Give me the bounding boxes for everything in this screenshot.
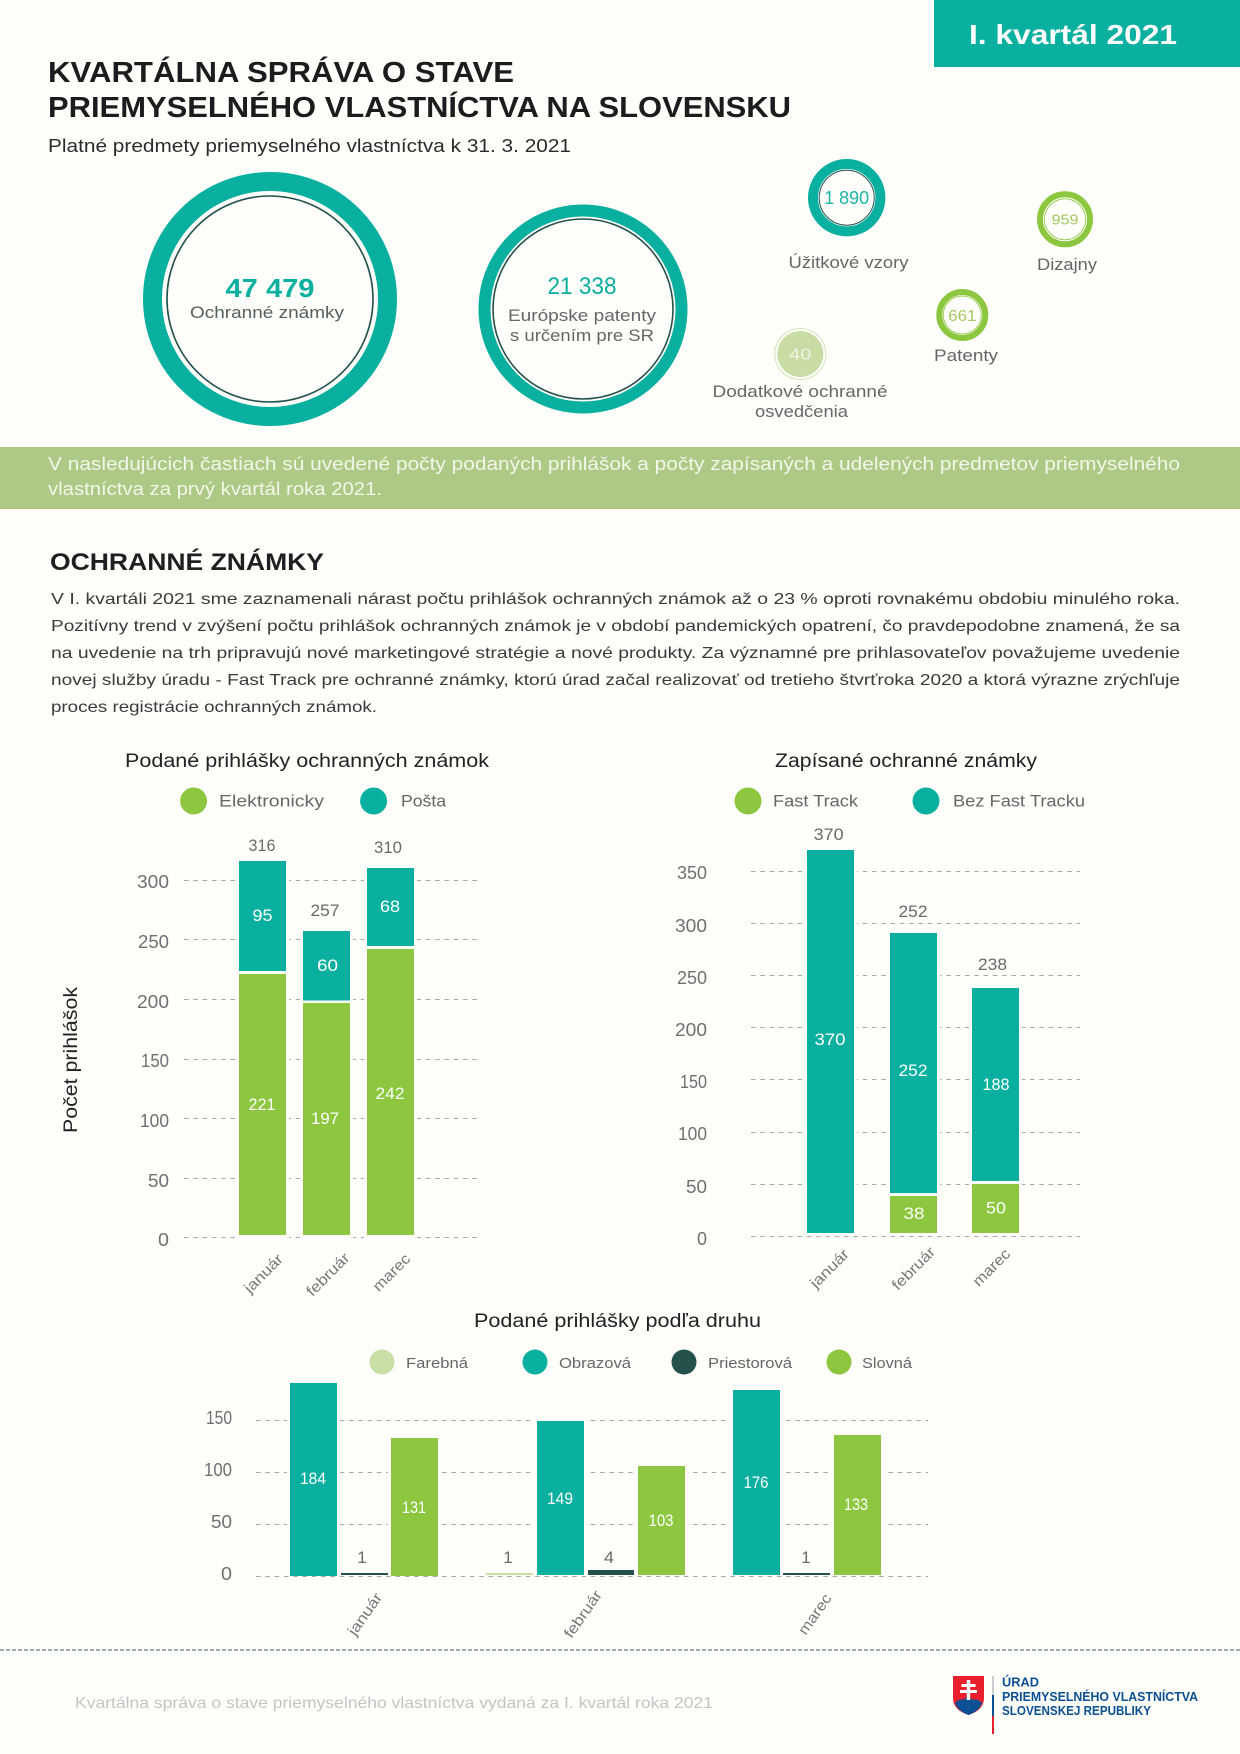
footer note: Kvartálna správa o stave priemyselného vlastníctva vydaná za I. kvartál roka 2021	[75, 1695, 713, 1712]
stat circle: dodatkové ochranné osvedčenia	[712, 328, 888, 421]
logo: úrad priemyselného vlastníctva: PRIEMYSELNÉHO VLASTNÍCTVA	[1002, 1689, 1199, 1704]
x axis labels: január	[240, 1251, 287, 1298]
stat circle: dizajny	[1037, 194, 1098, 274]
quarter tab	[934, 0, 1240, 67]
bar values: 176	[744, 1474, 768, 1492]
title	[48, 55, 791, 124]
title: PRIEMYSELNÉHO VLASTNÍCTVA NA SLOVENSKU	[48, 90, 791, 124]
bar values: 370	[814, 825, 844, 844]
body paragraph: Pozitívny trend v zvýšení počtu prihlášok ochranných známok je v období pandemických opatrení, čo pravdepodobne znamená, že sa	[51, 618, 1180, 635]
body paragraph: na uvedenie na trh pripravujú nové marketingové stratégie a nové produkty. Za významné pre prihlasovateľov považujeme uvedenie	[51, 645, 1180, 662]
stat circle: dizajny: 959	[1052, 212, 1078, 228]
stat circle: európske patenty	[484, 210, 682, 408]
legend: Elektronicky	[219, 792, 325, 810]
legend: Obrazová	[559, 1355, 632, 1372]
bar values: 184	[300, 1470, 326, 1488]
y axis title: Počet prihlášok	[61, 986, 82, 1133]
stat circle: dizajny: Dizajny	[1037, 255, 1098, 274]
y axis labels: 300	[137, 872, 169, 892]
legend: Bez Fast Tracku	[953, 792, 1085, 810]
y axis labels	[204, 1408, 232, 1584]
y axis labels: 250	[677, 968, 707, 988]
title: KVARTÁLNA SPRÁVA O STAVE	[48, 55, 514, 89]
bar values: 60	[317, 957, 338, 975]
bar values: 4	[604, 1548, 614, 1567]
legend	[734, 788, 1085, 814]
bar values: 252	[898, 1062, 928, 1080]
y axis labels: 0	[158, 1230, 169, 1250]
bar values: 238	[978, 955, 1007, 974]
icon: coat of arms shield	[953, 1676, 984, 1715]
stat circle: dodatkové ochranné osvedčenia: Dodatkové ochranné	[712, 382, 888, 401]
y axis labels: 50	[211, 1512, 232, 1532]
bar values: 370	[814, 1031, 846, 1049]
bar values: 149	[547, 1490, 573, 1508]
subtitle: Platné predmety priemyselného vlastníctva k 31. 3. 2021	[48, 135, 571, 156]
intro banner: V nasledujúcich častiach sú uvedené počty podaných prihlášok a počty zapísaných a udelených predmetov priemyselného	[48, 453, 1180, 474]
bar values: 252	[898, 902, 928, 921]
bar values: 316	[248, 836, 276, 855]
y axis labels	[675, 863, 707, 1249]
bar values: 131	[402, 1499, 426, 1517]
stat circle: patenty: 661	[948, 308, 976, 325]
bar values: 188	[982, 1076, 1010, 1094]
bar values	[300, 1470, 868, 1567]
bar values: 68	[380, 898, 400, 916]
body paragraph: proces registrácie ochranných známok.	[51, 699, 377, 716]
stat circle: úžitkové vzory	[788, 164, 909, 272]
stat circle: úžitkové vzory: Úžitkové vzory	[788, 253, 909, 272]
stat circle: patenty: Patenty	[934, 346, 999, 365]
logo: úrad priemyselného vlastníctva: SLOVENSKEJ REPUBLIKY	[1002, 1703, 1151, 1718]
stat circle: úžitkové vzory: 1 890	[824, 188, 869, 208]
bar values	[248, 836, 404, 1128]
legend: Pošta	[401, 792, 447, 810]
bar values: 310	[374, 838, 402, 857]
y axis labels: 0	[221, 1564, 232, 1584]
section heading: OCHRANNÉ ZNÁMKY	[50, 548, 324, 576]
y axis labels: 100	[140, 1111, 169, 1131]
bar values: 242	[376, 1085, 404, 1103]
body paragraph: V I. kvartáli 2021 sme zaznamenali nárast počtu prihlášok ochranných známok až o 23 % oproti rovnakému obdobiu minulého roka.	[51, 591, 1180, 608]
x axis labels: január	[344, 1590, 386, 1640]
legend: Slovná	[862, 1355, 913, 1372]
intro banner: vlastníctva za prvý kvartál roka 2021.	[48, 478, 382, 499]
y axis labels: 50	[148, 1171, 169, 1191]
x axis labels	[240, 1250, 414, 1300]
bar values: 103	[648, 1512, 674, 1530]
stacked bars	[236, 858, 417, 1240]
grouped bars	[287, 1380, 884, 1576]
stat circle: ochranné známky: 47 479	[226, 273, 314, 303]
y axis labels: 350	[677, 863, 707, 883]
bar values: 133	[844, 1496, 868, 1514]
x axis labels: marec	[370, 1250, 414, 1295]
bar values: 257	[310, 901, 340, 920]
stat circle: ochranné známky: Ochranné známky	[190, 303, 345, 322]
stat circle: patenty	[934, 292, 999, 365]
bar values: 50	[986, 1200, 1006, 1218]
x axis labels: január	[806, 1246, 853, 1293]
bar values: 38	[904, 1205, 924, 1223]
stat circle: európske patenty: Európske patenty	[508, 306, 657, 325]
legend	[370, 1350, 913, 1374]
bar values: 221	[248, 1096, 276, 1114]
y axis labels: 50	[686, 1177, 707, 1197]
quarter tab: I. kvartál 2021	[969, 19, 1177, 50]
bar values	[814, 825, 1010, 1223]
legend: Farebná	[406, 1355, 469, 1372]
x axis labels	[344, 1587, 836, 1641]
y axis labels: 150	[206, 1408, 232, 1428]
x axis labels: marec	[970, 1245, 1014, 1290]
y axis labels	[137, 872, 169, 1250]
stat circle: európske patenty: s určením pre SR	[510, 326, 654, 345]
y axis labels: 300	[675, 916, 707, 936]
x axis labels: február	[303, 1250, 353, 1300]
legend: Priestorová	[708, 1355, 793, 1372]
x axis labels: marec	[795, 1590, 836, 1638]
x axis labels: február	[561, 1587, 606, 1641]
y axis labels: 150	[141, 1051, 169, 1071]
chart: podané prihlášky podľa druhu	[204, 1311, 928, 1641]
y axis labels: 0	[697, 1229, 707, 1249]
bar values: 197	[311, 1110, 339, 1128]
stat circle: dodatkové ochranné osvedčenia: osvedčenia	[755, 402, 849, 421]
stat circle: ochranné známky	[152, 182, 388, 416]
stat circle: dodatkové ochranné osvedčenia: 40	[789, 346, 812, 364]
y axis labels: 200	[675, 1020, 707, 1040]
legend	[180, 788, 447, 814]
bar values: 1	[801, 1548, 811, 1567]
chart title: Podané prihlášky ochranných známok	[125, 751, 490, 772]
x axis labels	[806, 1244, 1014, 1294]
y axis labels: 100	[204, 1460, 232, 1480]
body paragraph	[51, 591, 1180, 716]
stat circle: európske patenty: 21 338	[548, 273, 616, 300]
intro banner	[0, 447, 1240, 509]
y axis labels: 250	[138, 932, 169, 952]
chart title: Podané prihlášky podľa druhu	[474, 1311, 761, 1332]
x axis labels: február	[889, 1244, 939, 1294]
y axis labels: 100	[678, 1124, 707, 1144]
chart title: Zapísané ochranné známky	[775, 751, 1038, 772]
y axis labels: 150	[680, 1072, 707, 1092]
legend: Fast Track	[773, 792, 859, 810]
bar values: 95	[252, 907, 272, 925]
body paragraph: novej služby úradu - Fast Track pre ochranné známky, ktorú úrad začal realizovať od tretieho štvrťroka 2020 a ktorá výrazne zrýchľuje	[51, 672, 1180, 689]
y axis labels: 200	[137, 992, 169, 1012]
bar values: 1	[503, 1548, 513, 1567]
chart: podané prihlášky ochranných známok	[61, 751, 490, 1300]
bar values: 1	[357, 1548, 367, 1567]
chart: zapísané ochranné známky	[675, 751, 1085, 1294]
stacked bars	[804, 847, 1022, 1233]
logo: úrad priemyselného vlastníctva	[953, 1674, 1199, 1734]
logo: úrad priemyselného vlastníctva: ÚRAD	[1002, 1674, 1039, 1690]
